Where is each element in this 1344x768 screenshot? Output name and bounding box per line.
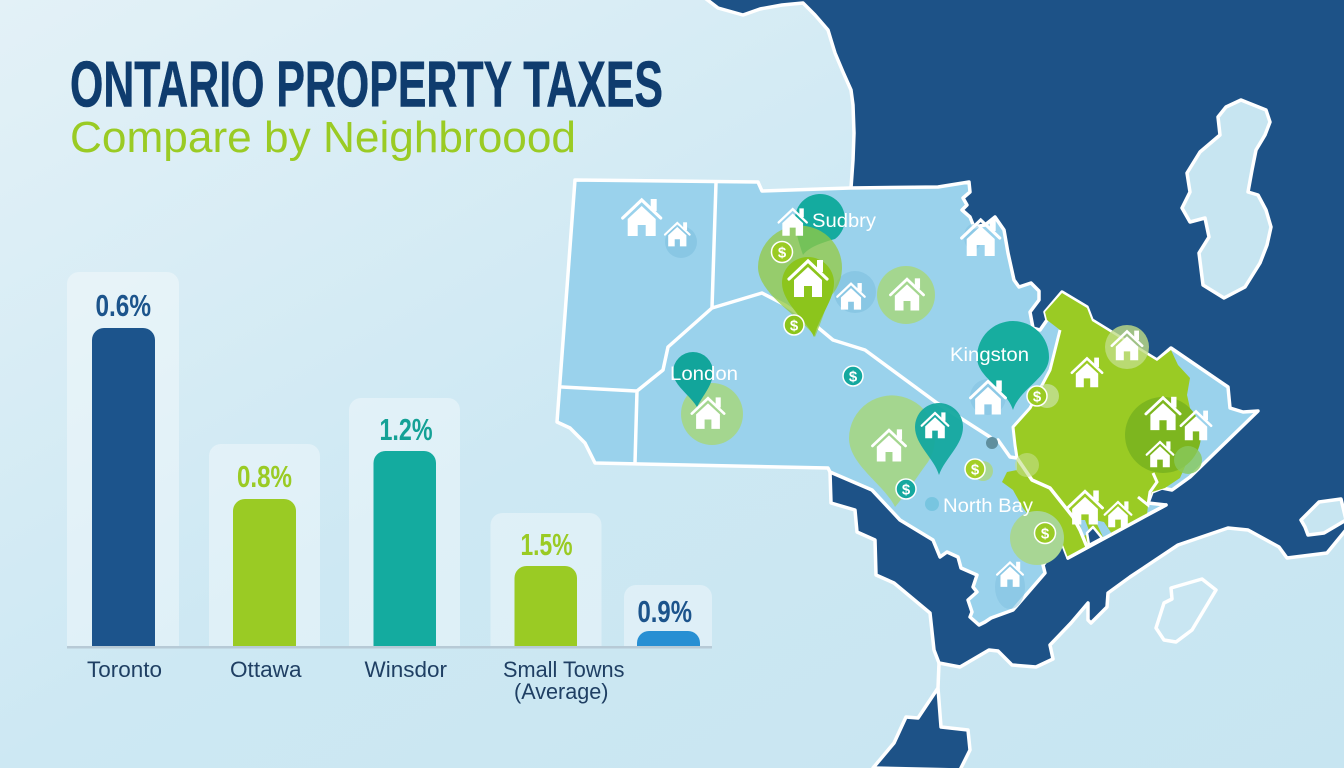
- region: coastal inlets: [1068, 473, 1166, 558]
- subtitle: Compare by Neighbroood: [70, 113, 576, 162]
- city labels: Sudbry: [812, 211, 877, 232]
- bar: Ottawa: [209, 444, 320, 647]
- icon: dollar badges: $: [849, 368, 858, 386]
- bar: Small Towns: [490, 513, 602, 647]
- map: [557, 0, 1344, 768]
- title: ONTARIO PROPERTY TAXES: [70, 48, 663, 120]
- region: highlighted green district: [1002, 293, 1195, 558]
- city labels: London: [670, 364, 738, 385]
- island: northeast lake island: [1182, 100, 1271, 298]
- axis labels: Winsdor: [364, 657, 447, 682]
- icon: dollar badges: $: [1033, 388, 1042, 406]
- pin: London: [673, 352, 713, 407]
- pin: large green: [849, 395, 935, 507]
- axis labels: [87, 657, 624, 704]
- city labels: North Bay: [943, 496, 1034, 517]
- bar chart: [67, 272, 712, 704]
- island: outline in southern land: [1156, 579, 1216, 642]
- city labels: [670, 211, 1034, 517]
- axis labels: Toronto: [87, 657, 162, 682]
- icon: dollar badges: $: [778, 244, 787, 262]
- bar: Toronto: [67, 272, 179, 647]
- water: dark lake and bay: [701, 0, 1344, 667]
- icon: dollar badges: $: [790, 318, 799, 334]
- pin: Sudbry: [758, 194, 845, 337]
- region: western green-edge line: [1013, 330, 1060, 458]
- pin: Kingston: [977, 321, 1049, 410]
- icon: dollar badges: $: [902, 482, 911, 498]
- icon: dollar badges: $: [971, 462, 980, 478]
- bar: Ottawa: 0.8%: [237, 459, 292, 494]
- bar: Winsdor: [349, 398, 460, 647]
- bar: Small Towns: 1.5%: [520, 527, 572, 562]
- icon: houses: [623, 199, 1211, 587]
- water: southern inlet: [873, 663, 970, 768]
- bar: Winsdor: 1.2%: [380, 412, 432, 447]
- icon: dollar badges: $: [1041, 526, 1050, 542]
- axis labels: Ottawa: [230, 657, 302, 682]
- bar: unlabeled 0.9%: [624, 585, 712, 647]
- city labels: Kingston: [950, 345, 1029, 366]
- bar: unlabeled 0.9%: 0.9%: [638, 594, 692, 629]
- axis labels: (Average): [514, 679, 608, 704]
- axis labels: Small Towns: [503, 657, 624, 682]
- island: east small island: [1301, 499, 1344, 535]
- bar: Toronto: 0.6%: [96, 288, 151, 323]
- marker circles: [665, 224, 1202, 609]
- icon: dollar badges: [772, 242, 1056, 544]
- pin: teal south: [915, 403, 963, 475]
- region: Ontario land: [557, 180, 1258, 625]
- region borders: [562, 183, 1087, 547]
